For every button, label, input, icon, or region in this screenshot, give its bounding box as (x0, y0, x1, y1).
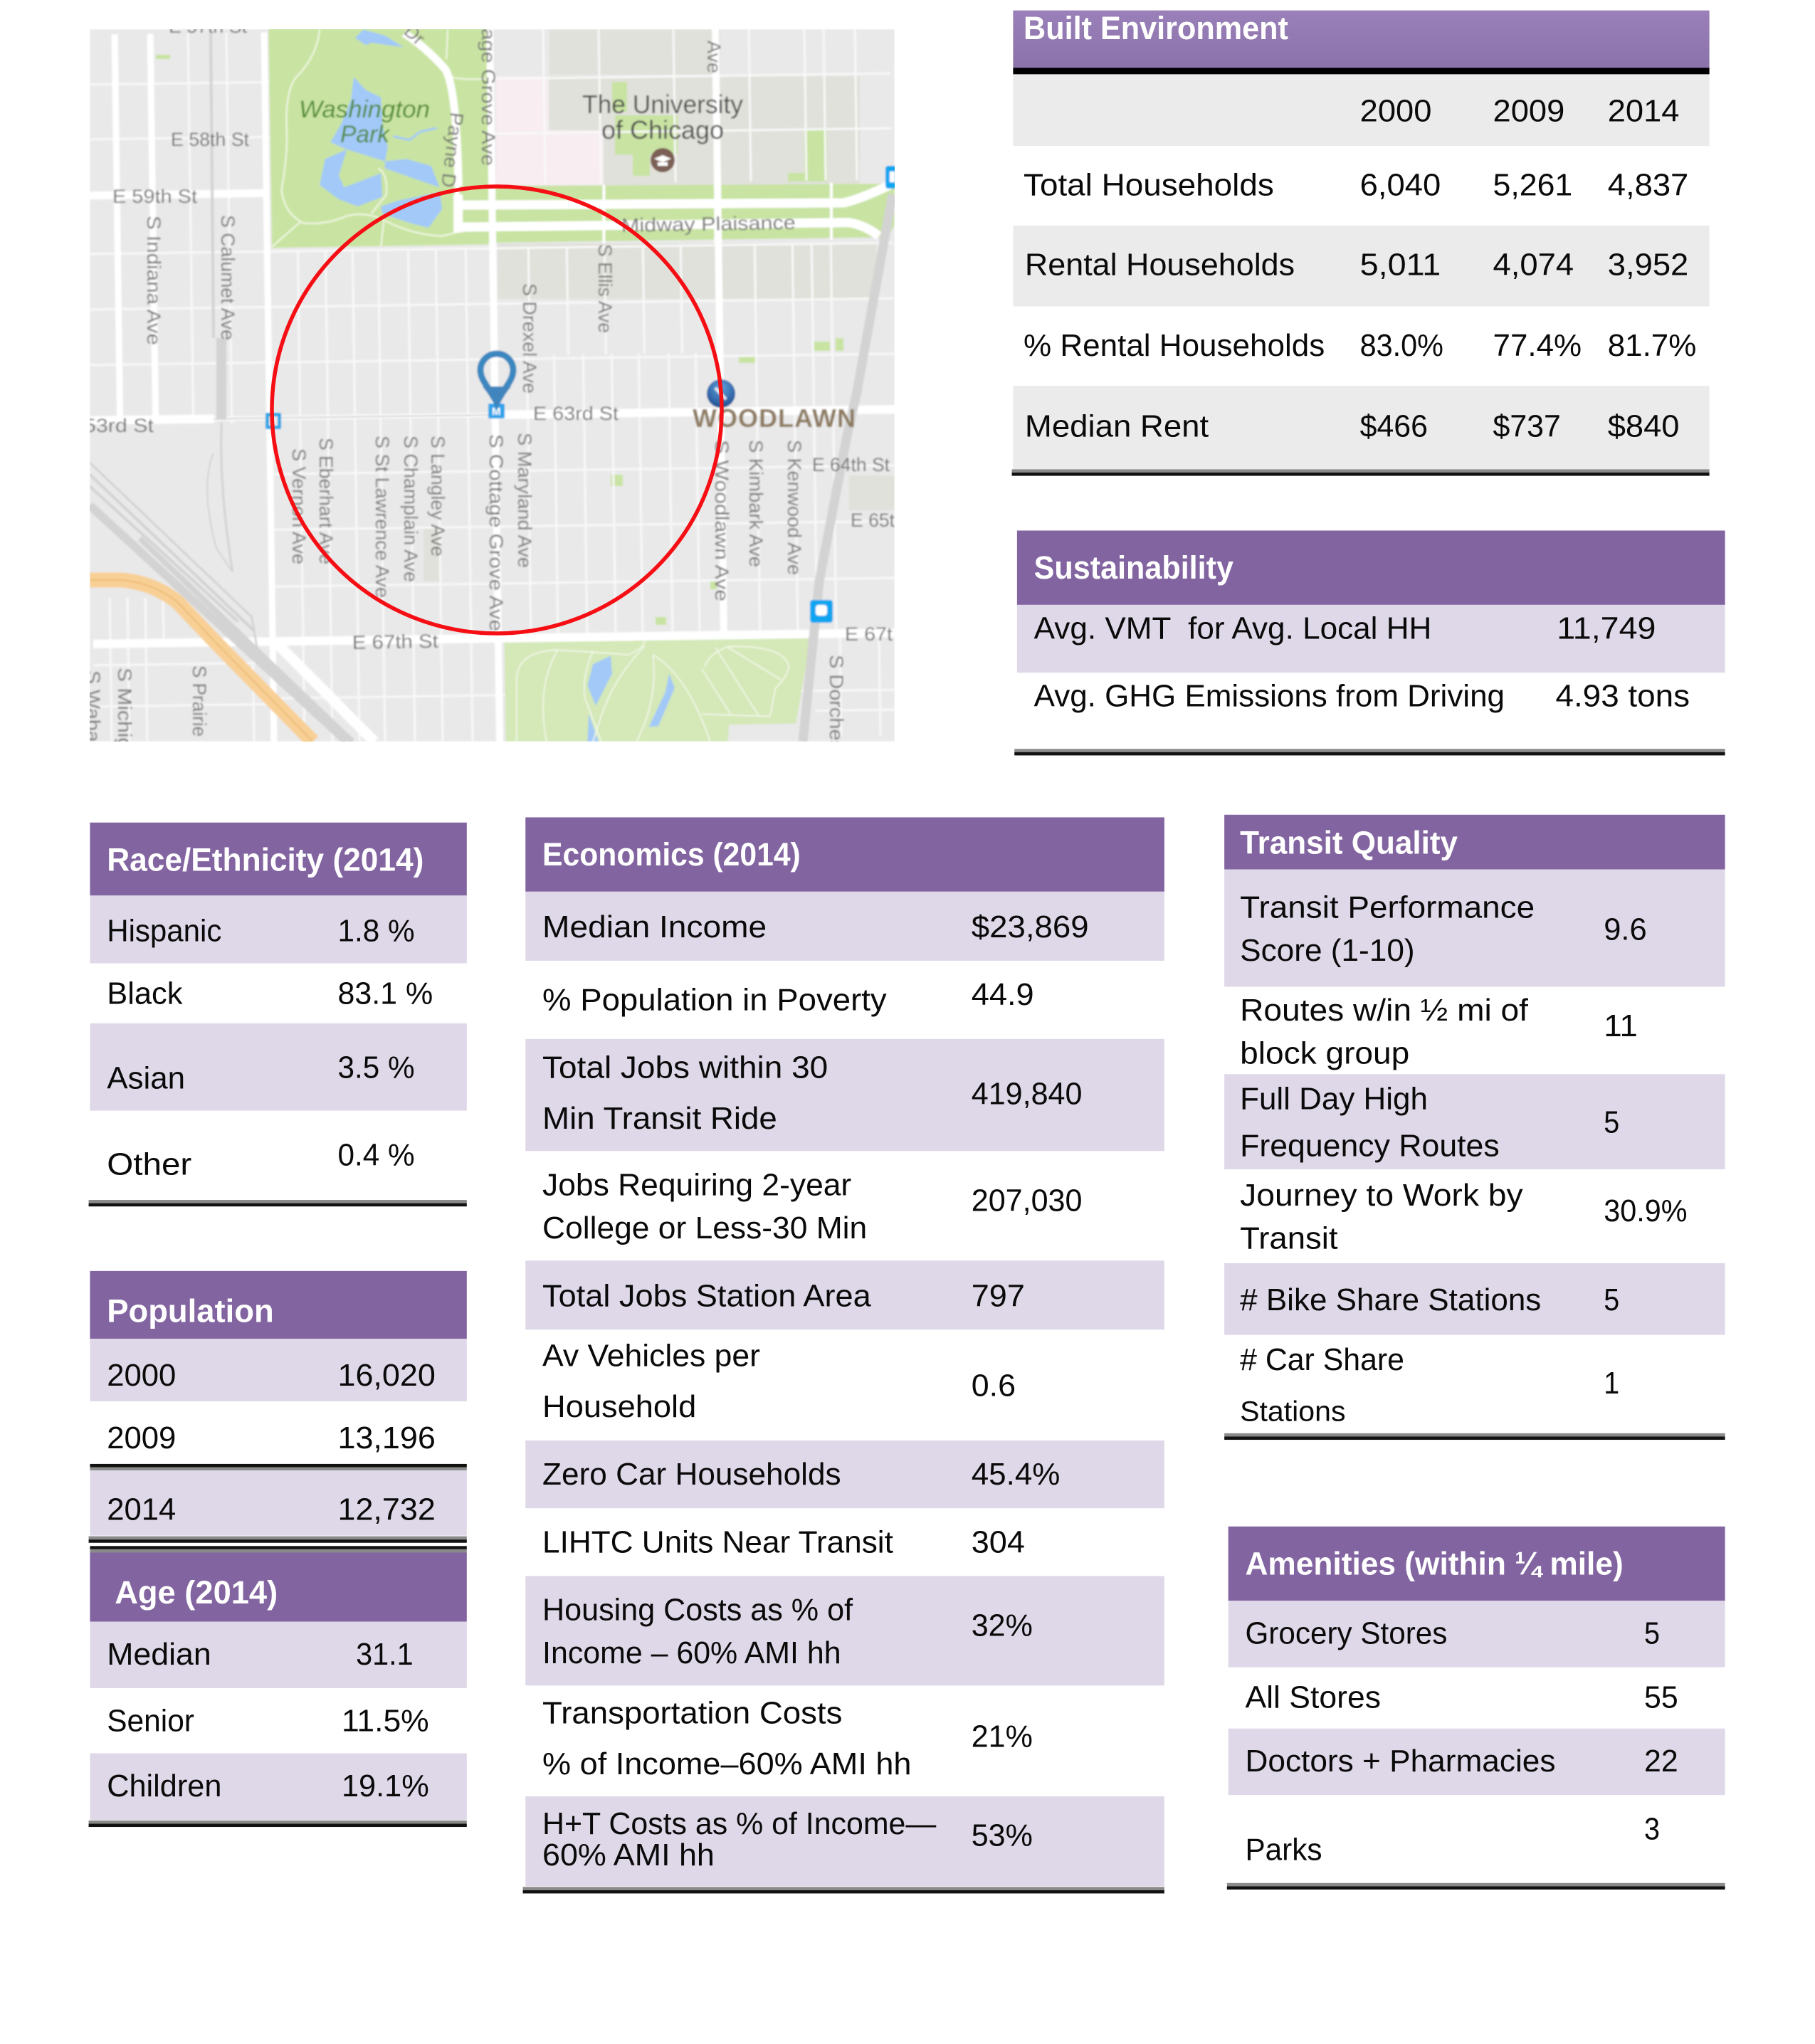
row: doctors and pharmacies: 22 (1644, 1744, 1678, 1779)
campus blocks (424, 29, 895, 581)
row: total households (1024, 168, 1688, 203)
panel: sustainability (1014, 530, 1725, 755)
map labels: The University (582, 90, 743, 119)
header: amenities (1229, 1527, 1725, 1601)
row: journey to work (1240, 1178, 1687, 1256)
Midway Plaisance (454, 180, 895, 243)
row: H+T costs: 60% AMI hh (542, 1838, 715, 1872)
map labels: Ave (703, 41, 725, 73)
row: jobs requiring 2-year college: Jobs Requiring 2-year (542, 1168, 851, 1203)
row: H+T costs: H+T Costs as % of Income— (542, 1806, 936, 1841)
South park (505, 638, 811, 742)
row: total jobs within 30 min (525, 1039, 1164, 1151)
row: zero car households: 45.4% (972, 1457, 1060, 1492)
row: transit performance score: Score (1-10) (1240, 933, 1415, 968)
row: parks: 3 (1644, 1811, 1660, 1846)
row: all stores (1245, 1680, 1678, 1714)
map labels: Payne D (437, 111, 468, 189)
row: rental households: 4,074 (1493, 247, 1574, 282)
map labels: S Langley Ave (427, 436, 448, 557)
row: zero car households (525, 1440, 1164, 1508)
map labels: S Michig (114, 668, 135, 749)
row: transit performance score: 9.6 (1604, 912, 1647, 947)
row: GHG emissions: 4.93 tons (1555, 679, 1690, 714)
row: 2009: 13,196 (337, 1421, 436, 1455)
row: black (107, 976, 433, 1011)
row: total households: 4,837 (1608, 168, 1688, 203)
header: population: Population (107, 1292, 274, 1329)
row: H+T costs: 53% (972, 1818, 1033, 1853)
row: other: 0.4 % (337, 1137, 415, 1172)
row: 2009: 2009 (107, 1421, 176, 1455)
row: total households: Total Households (1024, 168, 1274, 203)
major roads (85, 23, 900, 747)
row: grocery stores: Grocery Stores (1245, 1616, 1447, 1651)
map labels: E 58th St (171, 129, 249, 150)
row: 2000: 16,020 (337, 1358, 436, 1393)
header: sustainability (1017, 530, 1725, 605)
row: housing costs: Housing Costs as % of (542, 1593, 853, 1628)
row: H+T costs (525, 1796, 1164, 1886)
row: car share (1240, 1342, 1619, 1427)
row: 2014 (90, 1470, 467, 1536)
row: rental households: 3,952 (1608, 247, 1688, 282)
map labels: S Eberhart Ave (315, 438, 337, 564)
row: vehicle miles travelled: Avg. VMT for Avg. Local HH (1034, 611, 1431, 646)
header: age (90, 1552, 467, 1622)
row: median rent (1013, 386, 1710, 469)
icon: metro station marker (488, 404, 505, 418)
row: car share: # Car Share (1240, 1342, 1404, 1377)
map labels: E 59th St (112, 186, 198, 207)
header: transit quality: Transit Quality (1240, 825, 1458, 861)
map labels: S Champlain Ave (400, 436, 421, 582)
map labels: S St Lawrence Ave (372, 436, 393, 598)
row: zero car households: Zero Car Households (542, 1457, 841, 1492)
map labels: WOODLAWN (693, 404, 856, 433)
row: hispanic (90, 895, 467, 964)
row: journey to work: Journey to Work by (1240, 1178, 1523, 1213)
map labels: S Drexel Ave (519, 283, 540, 394)
row: rental households: Rental Households (1025, 247, 1295, 282)
row: transportation costs: % of Income–60% AMI hh (542, 1747, 911, 1781)
row: total jobs within 30 min: Total Jobs within 30 (542, 1050, 828, 1085)
row: 2000 (90, 1339, 467, 1401)
panel: amenities (1227, 1527, 1725, 1890)
row: parks (1245, 1811, 1660, 1867)
row: jobs requiring 2-year college: College or Less-30 Min (542, 1211, 867, 1245)
row: median rent: $737 (1493, 409, 1561, 444)
row: LIHTC units: LIHTC Units Near Transit (542, 1524, 893, 1559)
row: senior (107, 1703, 429, 1738)
map labels: S Cottage Grove Ave (485, 434, 507, 631)
icon: globe marker (707, 379, 735, 408)
map labels: E 57th St (169, 16, 247, 37)
panel: race and ethnicity (89, 823, 467, 1206)
row: senior: Senior (107, 1703, 194, 1738)
highway (90, 580, 313, 742)
row: median income (525, 892, 1164, 961)
map labels: S Maryland Ave (514, 433, 535, 568)
row: years: 2000 (1360, 93, 1431, 128)
header: transit quality (1224, 815, 1725, 870)
icon: metro station marker: M (492, 406, 500, 418)
row: frequency routes: Full Day High (1240, 1082, 1428, 1117)
map labels: 53rd St (84, 415, 154, 436)
row: jobs requiring 2-year college: 207,030 (972, 1184, 1082, 1218)
map labels: S Vernon Ave (288, 448, 310, 564)
map labels: S Calumet Ave (217, 215, 238, 340)
row: hispanic: 1.8 % (337, 913, 415, 948)
map labels: Washington (299, 96, 430, 123)
row: other: Other (107, 1147, 191, 1181)
row: total jobs station area (525, 1260, 1164, 1329)
row: housing costs: 32% (972, 1608, 1033, 1643)
header: economics (525, 817, 1164, 892)
row: median income: $23,869 (972, 910, 1089, 944)
row: car share: Stations (1240, 1396, 1346, 1427)
row: population in poverty: % Population in Poverty (542, 983, 887, 1018)
row: journey to work: 30.9% (1604, 1194, 1687, 1228)
row: children (90, 1754, 467, 1820)
row: asian: 3.5 % (337, 1050, 415, 1085)
map labels: E 63rd St (533, 403, 619, 424)
row: children: Children (107, 1769, 221, 1803)
map labels: S Indiana Ave (143, 216, 164, 345)
map labels: of Chicago (601, 115, 724, 144)
row: jobs requiring 2-year college (542, 1168, 1082, 1245)
row: median rent: $466 (1360, 409, 1428, 444)
row: doctors and pharmacies: Doctors + Pharmacies (1245, 1744, 1555, 1779)
map labels (83, 16, 895, 752)
row: median age: 31.1 (356, 1637, 414, 1672)
row: bike share (1224, 1263, 1725, 1335)
row: total households: 6,040 (1360, 168, 1441, 203)
row: routes within half mile: block group (1240, 1036, 1409, 1071)
icon: location pin (480, 354, 513, 406)
row: population in poverty: 44.9 (972, 977, 1034, 1012)
panel: age (89, 1546, 467, 1827)
radius circle (272, 186, 722, 633)
row: other (107, 1137, 415, 1181)
row: percent rental households: 77.4% (1493, 328, 1582, 363)
row: frequency routes: Frequency Routes (1240, 1129, 1500, 1164)
map labels: S Dorches (826, 655, 847, 751)
row: GHG emissions: Avg. GHG Emissions from Driving (1034, 679, 1505, 714)
map labels: S Kimbark Ave (745, 440, 767, 567)
row: black: 83.1 % (337, 976, 433, 1011)
row: 2009 (107, 1421, 436, 1455)
row: total jobs within 30 min: Min Transit Ride (542, 1101, 777, 1136)
row: median rent: Median Rent (1025, 409, 1209, 444)
row: asian: Asian (107, 1060, 185, 1095)
row: vehicle miles travelled (1017, 605, 1725, 673)
row: all stores: 55 (1644, 1680, 1678, 1714)
map labels: S Woodlawn Ave (711, 440, 732, 601)
header: built environment: Built Environment (1024, 10, 1288, 46)
icon: university marker (651, 148, 675, 172)
map: Woodlawn station area (83, 16, 900, 752)
row: transit performance score (1224, 870, 1725, 987)
map labels: S Kenwood Ave (784, 440, 805, 575)
row: transit performance score: Transit Performance (1240, 890, 1535, 924)
row: vehicles per household (542, 1339, 1016, 1424)
map labels: S Prairie (189, 665, 210, 737)
row: frequency routes (1224, 1074, 1725, 1169)
header: built environment (1013, 10, 1710, 74)
row: senior: 11.5% (342, 1703, 429, 1738)
header: economics: Economics (2014) (542, 836, 801, 873)
row: total households: 5,261 (1493, 168, 1572, 203)
row: all stores: All Stores (1245, 1680, 1381, 1714)
row: grocery stores: 5 (1644, 1616, 1660, 1651)
panel: transit quality (1224, 815, 1725, 1440)
row: routes within half mile: Routes w/in ½ mi of (1240, 993, 1529, 1028)
header: amenities: Amenities (within ¼ mile) (1245, 1546, 1624, 1582)
map labels: S Wabas (83, 670, 104, 752)
row: median age: Median (107, 1637, 211, 1672)
row: median income: Median Income (542, 910, 767, 944)
Washington Park (268, 28, 488, 248)
row: percent rental households (1024, 328, 1696, 363)
row: parks: Parks (1245, 1833, 1322, 1867)
row: rental households (1013, 226, 1710, 306)
row: bike share: # Bike Share Stations (1240, 1282, 1541, 1317)
row: percent rental households: 81.7% (1608, 328, 1696, 363)
row: total jobs station area: Total Jobs Station Area (542, 1278, 871, 1313)
row: population in poverty (542, 977, 1034, 1018)
row: median rent: $840 (1608, 409, 1679, 444)
row: years (1013, 74, 1710, 146)
map labels: E 64th St (812, 454, 890, 475)
icon: transit stops (265, 166, 897, 623)
map labels: Midway Plaisance (621, 212, 796, 236)
row: median age (90, 1622, 467, 1688)
street grid (85, 23, 900, 747)
row: vehicle miles travelled: 11,749 (1557, 611, 1656, 646)
row: vehicles per household: Av Vehicles per (542, 1339, 760, 1374)
row: years: 2014 (1608, 93, 1679, 128)
panel: economics (523, 817, 1164, 1893)
map labels: E 67t (845, 623, 893, 645)
map labels: age Grove Ave (478, 28, 499, 166)
row: transportation costs: 21% (972, 1719, 1033, 1754)
row: housing costs (525, 1576, 1164, 1685)
row: car share: 1 (1604, 1366, 1619, 1401)
row: transportation costs (542, 1695, 1033, 1781)
panel: built environment (1012, 10, 1710, 476)
map labels: S Ellis Ave (594, 244, 616, 333)
row: percent rental households: % Rental Households (1024, 328, 1325, 363)
row: LIHTC units: 304 (972, 1524, 1025, 1559)
map labels: Dr (400, 20, 429, 49)
rail corridors (90, 33, 893, 742)
row: 2000: 2000 (107, 1358, 176, 1393)
row: black: Black (107, 976, 183, 1011)
map labels: E 67th St (352, 631, 439, 653)
row: routes within half mile (1240, 993, 1638, 1071)
row: journey to work: Transit (1240, 1221, 1338, 1256)
row: total jobs station area: 797 (972, 1278, 1025, 1313)
header: race and ethnicity (90, 823, 467, 895)
row: years: 2009 (1493, 93, 1564, 128)
row: grocery stores (1229, 1601, 1725, 1668)
row: rental households: 5,011 (1360, 247, 1441, 282)
header: population (90, 1271, 467, 1339)
row: children: 19.1% (342, 1769, 429, 1803)
panel: population (89, 1271, 467, 1543)
header: race and ethnicity: Race/Ethnicity (2014) (107, 842, 424, 878)
map labels: E 65t (851, 510, 895, 531)
row: frequency routes: 5 (1604, 1105, 1619, 1140)
row: hispanic: Hispanic (107, 913, 221, 948)
header: age: Age (2014) (115, 1574, 278, 1611)
row: vehicles per household: 0.6 (972, 1369, 1016, 1403)
row: 2014: 2014 (107, 1492, 176, 1527)
row: routes within half mile: 11 (1604, 1008, 1638, 1043)
row: vehicles per household: Household (542, 1389, 696, 1424)
row: housing costs: Income – 60% AMI hh (542, 1635, 841, 1670)
row: percent rental households: 83.0% (1360, 328, 1443, 363)
row: asian (90, 1023, 467, 1111)
row: bike share: 5 (1604, 1282, 1619, 1317)
row: 2014: 12,732 (337, 1492, 436, 1527)
row: transportation costs: Transportation Costs (542, 1695, 842, 1730)
row: total jobs within 30 min: 419,840 (972, 1076, 1082, 1111)
map labels: Park (340, 121, 391, 148)
header: sustainability: Sustainability (1034, 549, 1233, 586)
row: doctors and pharmacies (1229, 1729, 1725, 1795)
